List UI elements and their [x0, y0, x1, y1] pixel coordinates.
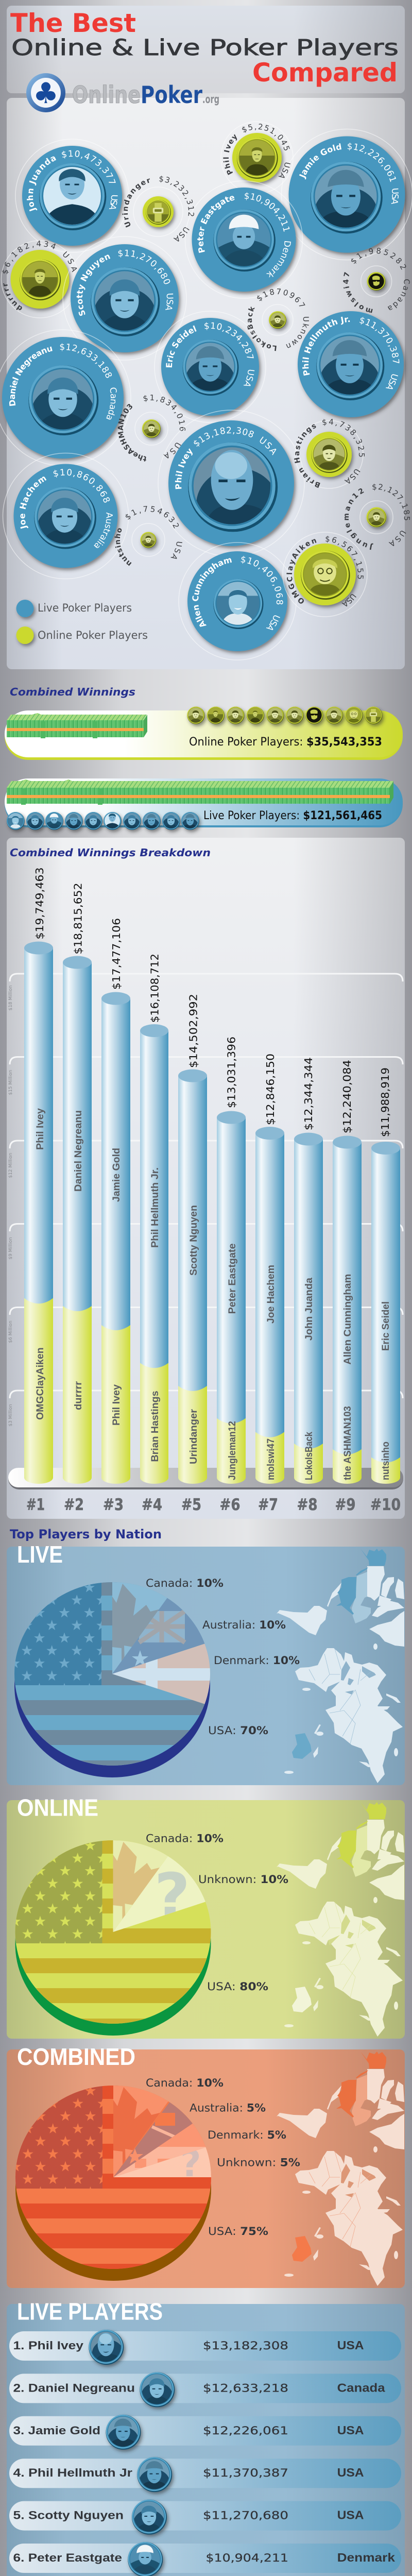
bubble: Phil Hellmuth Jr.: Phil Hellmuth Jr.	[302, 316, 350, 376]
bar #4: $16,108,712	[149, 954, 161, 1023]
bubble: Brian Hastings online	[284, 410, 368, 489]
bubble: nutsinho online: $1,754632	[123, 489, 183, 550]
bubble: Jungleman12 online: Jungleman12	[338, 485, 381, 551]
live cash stack	[7, 779, 393, 805]
bubble: Jamie Gold	[281, 129, 412, 260]
label: Canada 10%: Canada: 10%	[146, 1832, 224, 1844]
bar #2: durrrr	[73, 1381, 84, 1410]
bubble: Jungleman12 online: $2,127,185	[371, 477, 412, 527]
bar #10: nutsinho	[381, 1442, 391, 1480]
panel: combined nations	[7, 2043, 405, 2288]
bubble: Phil Ivey live	[158, 404, 304, 556]
bubble: Joe Hachem: Australia	[89, 512, 117, 552]
rank labels: #4	[142, 1496, 162, 1514]
bubble: Phil Ivey online: USA	[278, 163, 290, 178]
bubble: durrrr online: USA	[63, 251, 77, 272]
row: 2 Daniel Negreanu: 2. Daniel Negreanu	[13, 2381, 135, 2394]
row: 6 Peter Eastgate: $10,904,211	[206, 2552, 288, 2564]
bubble: Urindanger online: $3,232,312	[159, 176, 194, 216]
bubble: OMGClayAiken online	[270, 531, 367, 617]
legend	[16, 600, 148, 644]
row: 1 Phil Ivey: USA	[337, 2338, 364, 2352]
row: 5 Scotty Nguyen	[9, 2500, 401, 2536]
bubble: durrrr online: $6,182,434	[2, 241, 56, 274]
pie chart: combined: ?	[180, 2143, 201, 2185]
rank labels: #3	[103, 1496, 124, 1514]
panel: live players table	[7, 2298, 405, 2576]
label: Canada 10%: Canada: 10%	[146, 1577, 224, 1589]
legend: online marker	[16, 626, 34, 644]
panel: combined winnings breakdown	[7, 838, 405, 1519]
bubble: durrrr online	[0, 234, 84, 318]
bubble: Phil Ivey live: Phil Ivey	[169, 445, 199, 490]
chart gridlines and axis	[8, 974, 403, 1427]
logo: OnlinePoker.org: ♣	[33, 77, 59, 110]
bubble: Phil Ivey online: Phil Ivey	[223, 134, 237, 175]
bubble: Phil Ivey online	[210, 109, 293, 194]
bar #6: Jungleman12	[227, 1421, 238, 1480]
bubble: Joe Hachem: $10,860,868	[52, 455, 112, 516]
bubble: Eric Seidel: $10,234,287	[204, 322, 254, 359]
bubble: Allen Cunningham: $10,406,068	[237, 554, 287, 605]
bubble: Urindanger online	[109, 174, 196, 247]
title line: Online & Live Poker Players: Online & Live Poker Players	[11, 35, 399, 61]
legend: live label: Live Poker Players	[38, 602, 132, 614]
bar #8: LokoIsBack	[304, 1432, 315, 1480]
label: Denmark 10%: Denmark: 10%	[214, 1654, 300, 1667]
bubble: Brian Hastings online: USA	[341, 465, 363, 489]
logo: OnlinePoker.org: Poker	[141, 81, 202, 109]
legend: live marker	[16, 600, 34, 617]
row: 5 Scotty Nguyen: USA	[337, 2509, 364, 2522]
bubble: molswi47 online: molswi47	[343, 272, 373, 313]
bar #2	[63, 883, 92, 1484]
bubble: Scotty Nguyen	[59, 236, 186, 360]
row: 3 Jamie Gold: 3. Jamie Gold	[13, 2424, 100, 2437]
rank labels	[26, 1496, 401, 1514]
title line: Compared: Compared	[252, 58, 398, 88]
bubble: Allen Cunningham: USA	[263, 612, 282, 634]
row: 4 Phil Hellmuth Jr: $11,370,387	[203, 2467, 288, 2479]
world map	[277, 1549, 404, 1783]
online player avatars	[187, 707, 382, 724]
bubble: Peter Eastgate: $10,904,211	[244, 192, 289, 232]
bar #6	[217, 1037, 246, 1484]
bubble: LokoIsBack online: Uknown	[286, 317, 309, 348]
label: USA 75%: USA: 75%	[208, 2225, 268, 2238]
bar #4	[140, 954, 168, 1484]
bubble: OMGClayAiken online: $6,567,155	[325, 534, 365, 580]
panel: player bubbles background	[7, 98, 405, 669]
bubble: Jamie Gold: Jamie Gold	[299, 143, 341, 179]
panel: live nations	[7, 1541, 405, 1785]
bubble: Jungleman12 online: USA	[385, 526, 408, 552]
live player avatars	[7, 812, 199, 831]
rank labels: #9	[335, 1496, 355, 1514]
label: Australia 10%: Australia: 10%	[202, 1619, 286, 1631]
rank labels: #8	[297, 1496, 317, 1514]
bar #1: $19,749,463	[33, 868, 46, 940]
bar #6: $13,031,396	[226, 1037, 238, 1108]
world map	[277, 1802, 404, 2037]
label: COMBINED: COMBINED	[17, 2043, 135, 2070]
bubble: LokoIsBack online: LokoIsBack	[247, 306, 277, 351]
label: Unknown 10%: Unknown: 10%	[198, 1873, 288, 1886]
bubble: Phil Ivey live: USA	[255, 435, 281, 459]
heading: LIVE PLAYERS: LIVE PLAYERS	[17, 2298, 163, 2325]
world map	[277, 2052, 404, 2286]
row: 1 Phil Ivey: 1. Phil Ivey	[13, 2339, 84, 2352]
bar #7	[255, 1054, 284, 1484]
pie chart: online: ?	[154, 1861, 190, 1933]
bar #9: $12,240,084	[341, 1060, 353, 1133]
bubble: Allen Cunningham	[171, 543, 296, 660]
heading: Combined Winnings: Combined Winnings	[10, 686, 135, 698]
bubble: OMGClayAiken online: USA	[338, 590, 358, 612]
bubble: Urindanger online: Urindanger	[122, 178, 150, 228]
bubble: Jungleman12 online	[338, 477, 412, 552]
bar: online winnings	[5, 707, 403, 760]
bubble: durrrr online: durrrr	[3, 283, 22, 310]
bar #9: the ASHMAN103	[342, 1406, 353, 1480]
row: 6 Peter Eastgate: Denmark	[337, 2551, 395, 2564]
bar #6: Peter Eastgate	[227, 1243, 238, 1314]
chart gridlines and axis: $3 Million	[8, 1404, 13, 1427]
bubble: Allen Cunningham: Allen Cunningham	[171, 550, 256, 630]
chart gridlines and axis: $12 Million	[8, 1153, 13, 1178]
bubble: theASHMAN103 online	[112, 384, 189, 464]
label: USA 70%: USA: 70%	[208, 1724, 268, 1737]
bubble: Joe Hachem	[3, 453, 129, 579]
rank labels: #6	[219, 1496, 240, 1514]
row: 4 Phil Hellmuth Jr	[9, 2457, 401, 2495]
bubble: Joe Hachem: Joe Hachem	[5, 472, 60, 531]
bar #10: $11,988,919	[379, 1067, 391, 1137]
row: 6 Peter Eastgate	[9, 2542, 401, 2576]
bar #10	[371, 1067, 400, 1484]
row: 3 Jamie Gold: $12,226,061	[203, 2425, 288, 2437]
bar #5: Scotty Nguyen	[188, 1205, 199, 1276]
label: USA 80%: USA: 80%	[207, 1980, 268, 1993]
heading: Top Players by Nation: Top Players by Nation	[10, 1527, 162, 1541]
bubble: LokoIsBack online: $1870967	[257, 289, 305, 306]
bar #4: Phil Hellmuth Jr.	[150, 1167, 161, 1248]
row: 5 Scotty Nguyen: 5. Scotty Nguyen	[13, 2509, 124, 2522]
row: 3 Jamie Gold: USA	[337, 2424, 364, 2437]
bar #3: $17,477,106	[110, 918, 123, 990]
bubble: Phil Hellmuth Jr.: USA	[386, 374, 398, 389]
bar #2: Daniel Negreanu	[73, 1110, 84, 1192]
bar #1: Phil Ivey	[35, 1108, 46, 1150]
label: Canada 10%: Canada: 10%	[146, 2077, 224, 2089]
chart gridlines and axis: $18 Million	[8, 985, 13, 1011]
bubble: theASHMAN103 online: theASHMAN103	[112, 401, 155, 463]
row: 2 Daniel Negreanu: Canada	[337, 2381, 385, 2394]
title line: The Best: The Best	[10, 8, 136, 38]
bar #1: OMGClayAiken	[35, 1347, 46, 1420]
bubble: Phil Hellmuth Jr.: $11,370,387	[359, 317, 400, 363]
bar #10: Eric Seidel	[381, 1301, 391, 1351]
bubble: Daniel Negreanu: Daniel Negreanu	[9, 346, 53, 406]
chart gridlines and axis: $15 Million	[8, 1070, 13, 1095]
bar #8: $12,344,344	[302, 1057, 315, 1130]
bubble: John Juanda: USA	[109, 195, 118, 209]
bar #5: Urindanger	[188, 1409, 199, 1464]
row: 3 Jamie Gold	[9, 2415, 401, 2452]
bubble: Peter Eastgate	[183, 181, 303, 298]
bubble: Daniel Negreanu: $12,633,188	[60, 343, 112, 378]
logo: OnlinePoker.org: .org	[202, 93, 219, 106]
bubble: John Juanda: John Juanda	[27, 157, 57, 211]
pie chart: live	[14, 1582, 210, 1777]
legend: online label: Online Poker Players	[38, 629, 148, 641]
bubble: LokoIsBack online	[245, 273, 315, 352]
online total: Online Poker Players: $35,543,353	[189, 736, 382, 749]
bubble: Jamie Gold: $12,226,061	[347, 142, 396, 182]
bar: live winnings	[5, 778, 403, 831]
rank labels: #7	[258, 1496, 278, 1514]
bubble: nutsinho online	[101, 489, 184, 568]
bar #5	[178, 994, 207, 1484]
row: 2 Daniel Negreanu: $12,633,218	[203, 2382, 288, 2394]
bubble: nutsinho online: nutsinho	[101, 524, 146, 568]
bubble: Eric Seidel: Eric Seidel	[166, 326, 197, 368]
bar #4: Brian Hastings	[150, 1391, 161, 1462]
rank labels: #1	[26, 1496, 45, 1514]
label: Australia 5%: Australia: 5%	[190, 2102, 266, 2114]
bubble: John Juanda	[11, 138, 129, 252]
chart base platform	[8, 1468, 403, 1489]
bubble: Phil Hellmuth Jr.	[289, 311, 408, 417]
bubble: Scotty Nguyen: Scotty Nguyen	[76, 255, 110, 316]
heading: Combined Winnings Breakdown: Combined Winnings Breakdown	[10, 846, 211, 859]
bubble: Daniel Negreanu: Canada	[97, 386, 125, 423]
bubble: molswi47 online	[339, 232, 412, 315]
panel: title	[7, 6, 405, 93]
row: 2 Daniel Negreanu	[9, 2372, 401, 2409]
row: 5 Scotty Nguyen: $11,270,680	[203, 2510, 288, 2522]
online cash stack	[7, 713, 147, 738]
row: 6 Peter Eastgate: 6. Peter Eastgate	[13, 2551, 122, 2564]
bubble: nutsinho online: USA	[168, 540, 184, 562]
rank labels: #10	[370, 1496, 401, 1514]
bar #8: John Juanda	[304, 1278, 315, 1341]
bar #9	[333, 1060, 362, 1484]
bar #7: molswi47	[266, 1438, 277, 1480]
row: 4 Phil Hellmuth Jr: 4. Phil Hellmuth Jr	[13, 2466, 133, 2479]
bar #2: $18,815,652	[72, 883, 84, 954]
bubble: molswi47 online: $1,985282	[351, 248, 406, 270]
bubble: OMGClayAiken online: OMGClayAiken	[270, 531, 340, 606]
bar #5: $14,502,992	[187, 994, 200, 1068]
rank labels: #5	[181, 1496, 201, 1514]
chart gridlines and axis: $6 Million	[8, 1320, 13, 1343]
bubble: Urindanger online: USA	[173, 227, 190, 242]
bubble: theASHMAN103 online: USA	[160, 438, 183, 464]
bar #3: Jamie Gold	[111, 1148, 122, 1202]
bar #9: Allen Cunningham	[342, 1274, 353, 1365]
panel: online nations	[7, 1794, 405, 2039]
bubble: Eric Seidel: USA	[243, 370, 254, 386]
label: ONLINE: ONLINE	[17, 1794, 98, 1821]
label: LIVE: LIVE	[17, 1541, 63, 1568]
pie chart: combined	[15, 2086, 211, 2281]
bar #1	[24, 868, 53, 1484]
label: Denmark 5%: Denmark: 5%	[208, 2129, 286, 2141]
rank labels: #2	[64, 1496, 84, 1514]
bar #8	[294, 1057, 323, 1484]
bubble: Jamie Gold: USA	[391, 189, 399, 204]
live total: Live Poker Players: $121,561,465	[203, 809, 382, 822]
bubble: Brian Hastings online: Brian Hastings	[284, 418, 337, 489]
bubble: Daniel Negreanu	[0, 330, 131, 466]
bubble: Scotty Nguyen: USA	[165, 294, 173, 310]
bubble: John Juanda: $10,473,377	[62, 150, 116, 183]
bubble: Brian Hastings online: $4,738,325	[320, 410, 368, 466]
chart gridlines and axis: $9 Million	[8, 1237, 13, 1260]
label: Unknown 5%: Unknown: 5%	[217, 2157, 300, 2169]
logo: OnlinePoker.org	[26, 73, 219, 112]
bubble: Phil Ivey online: $5,251,045	[242, 124, 290, 150]
bar #7: $12,846,150	[264, 1054, 277, 1125]
bubble: Phil Ivey live: $13,182,308	[191, 404, 259, 471]
bubble: theASHMAN103 online: $1,834,016	[142, 384, 189, 440]
bubble: Eric Seidel	[154, 311, 266, 422]
pie chart: online	[15, 1840, 211, 2036]
bar #7: Joe Hachem	[266, 1265, 277, 1324]
bar #3: Phil Ivey	[111, 1384, 122, 1426]
row: 1 Phil Ivey	[9, 2330, 401, 2368]
logo: OnlinePoker.org: Online	[72, 81, 141, 109]
bar #3	[101, 918, 130, 1484]
bubble: Scotty Nguyen: $11,270,680	[118, 249, 170, 284]
bubble: Peter Eastgate: Denmark	[266, 241, 291, 277]
bubble: Peter Eastgate: Peter Eastgate	[197, 196, 235, 253]
row: 1 Phil Ivey: $13,182,308	[203, 2340, 288, 2352]
bubble: molswi47 online: Canada	[387, 279, 410, 310]
row: 4 Phil Hellmuth Jr: USA	[337, 2466, 364, 2479]
